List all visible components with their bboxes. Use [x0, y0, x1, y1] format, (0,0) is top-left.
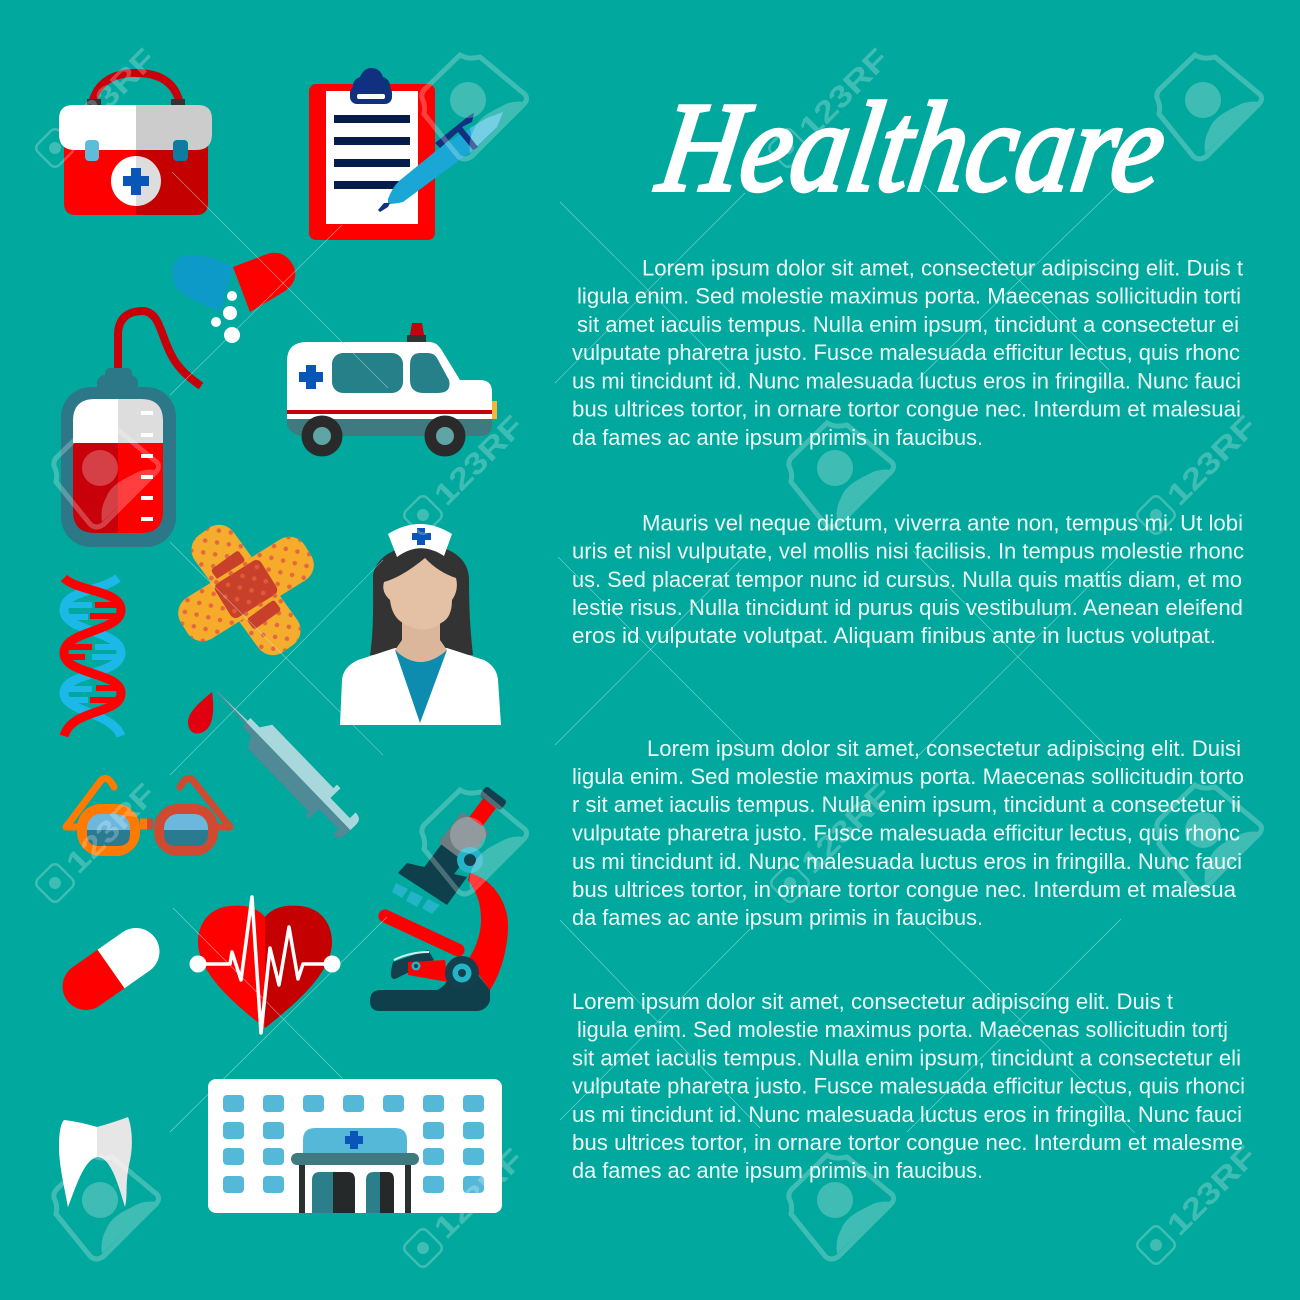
text block: paragraph 2: us. Sed placerat tempor nunc id cursus. Nulla quis mattis diam, et mo: [572, 567, 1242, 592]
text block: paragraph 1: us mi tincidunt id. Nunc malesuada luctus eros in fringilla. Nunc fauci: [572, 368, 1241, 394]
icon: ambulance: [287, 323, 497, 456]
text block: paragraph 1: Lorem ipsum dolor sit amet, consectetur adipiscing elit. Duis t: [642, 256, 1243, 280]
icon: tooth: [59, 1117, 132, 1207]
watermarks: 123RF: [60, 43, 162, 145]
text block: paragraph 3: ligula enim. Sed molestie maximus porta. Maecenas sollicitudin torto: [572, 764, 1244, 789]
text block: paragraph 1: ligula enim. Sed molestie maximus porta. Maecenas sollicitudin torti: [577, 284, 1241, 308]
icon: crossed bandages: [171, 518, 321, 662]
text block: paragraph 3: vulputate pharetra justo. Fusce malesuada efficitur lectus, quis rhonc: [572, 820, 1240, 846]
icon: nurse: [340, 524, 501, 725]
watermarks: 123RF: [795, 778, 897, 880]
icon: microscope: [370, 783, 510, 1011]
text block: paragraph 2: uris et nisl vulputate, vel mollis nisi facilisis. In tempus molestie rhonc: [572, 539, 1244, 564]
text block: paragraph 1: da fames ac ante ipsum primis in faucibus.: [572, 425, 983, 450]
text block: paragraph 3: da fames ac ante ipsum primis in faucibus.: [572, 905, 983, 930]
watermarks: 123RF: [1161, 1140, 1263, 1242]
text block: paragraph 4: [572, 989, 1245, 1183]
text block: paragraph 2: eros id vulputate volutpat. Aliquam finibus ante in luctus volutpat.: [572, 623, 1216, 648]
text block: paragraph 1: [572, 256, 1243, 450]
text block: paragraph 4: vulputate pharetra justo. Fusce malesuada efficitur lectus, quis rhonci: [572, 1074, 1245, 1098]
text block: paragraph 4: us mi tincidunt id. Nunc malesuada luctus eros in fringilla. Nunc fauci: [572, 1102, 1242, 1127]
icon: medical bag: [59, 73, 212, 215]
text block: paragraph 2: [572, 510, 1244, 648]
text block: paragraph 4: bus ultrices tortor, in ornare tortor congue nec. Interdum et malesme: [572, 1130, 1243, 1155]
icon: clipboard with pen: [309, 68, 503, 240]
text block: paragraph 1: sit amet iaculis tempus. Nulla enim ipsum, tincidunt a consectetur ei: [577, 312, 1239, 337]
text block: paragraph 1: bus ultrices tortor, in ornare tortor congue nec. Interdum et malesuai: [572, 396, 1241, 422]
watermarks: 123RF: [1161, 410, 1263, 512]
icon: open capsule: [172, 253, 295, 343]
text block: paragraph 3: bus ultrices tortor, in ornare tortor congue nec. Interdum et malesua: [572, 877, 1237, 902]
text block: paragraph 3: r sit amet iaculis tempus. Nulla enim ipsum, tincidunt a consectetur ii: [572, 792, 1241, 817]
title: Healthcare: [649, 76, 1175, 218]
text block: paragraph 2: lestie risus. Nulla tincidunt id purus quis vestibulum. Aenean eleifend: [572, 595, 1243, 620]
text block: paragraph 4: Lorem ipsum dolor sit amet, consectetur adipiscing elit. Duis t: [572, 989, 1173, 1014]
text block: paragraph 4: ligula enim. Sed molestie maximus porta. Maecenas sollicitudin tortj: [577, 1017, 1228, 1042]
icon: dna helix: [64, 578, 121, 736]
watermarks: 123RF: [428, 1143, 530, 1245]
icon: blood drop: [188, 692, 213, 734]
text block: paragraph 1: vulputate pharetra justo. Fusce malesuada efficitur lectus, quis rhonc: [572, 340, 1240, 365]
watermarks: 123RF: [793, 43, 895, 145]
text block: paragraph 4: da fames ac ante ipsum primis in faucibus.: [572, 1158, 983, 1183]
text block: paragraph 3: Lorem ipsum dolor sit amet, consectetur adipiscing elit. Duisi: [647, 736, 1241, 761]
watermarks: 123RF: [60, 778, 162, 880]
icon: blood bag: [61, 311, 201, 547]
icon: capsule: [53, 919, 169, 1019]
text block: paragraph 3: [572, 736, 1244, 930]
icon: glasses: [66, 778, 230, 851]
text block: paragraph 2: Mauris vel neque dictum, viverra ante non, tempus mi. Ut lobi: [642, 510, 1243, 536]
icon: heart with pulse: [190, 897, 340, 1033]
icon: syringe: [201, 677, 366, 845]
text block: paragraph 3: us mi tincidunt id. Nunc malesuada luctus eros in fringilla. Nunc fauci: [572, 849, 1242, 874]
icon: hospital: [208, 1079, 502, 1213]
text block: paragraph 4: sit amet iaculis tempus. Nulla enim ipsum, tincidunt a consectetur eli: [572, 1046, 1241, 1070]
watermarks: 123RF: [428, 410, 530, 512]
